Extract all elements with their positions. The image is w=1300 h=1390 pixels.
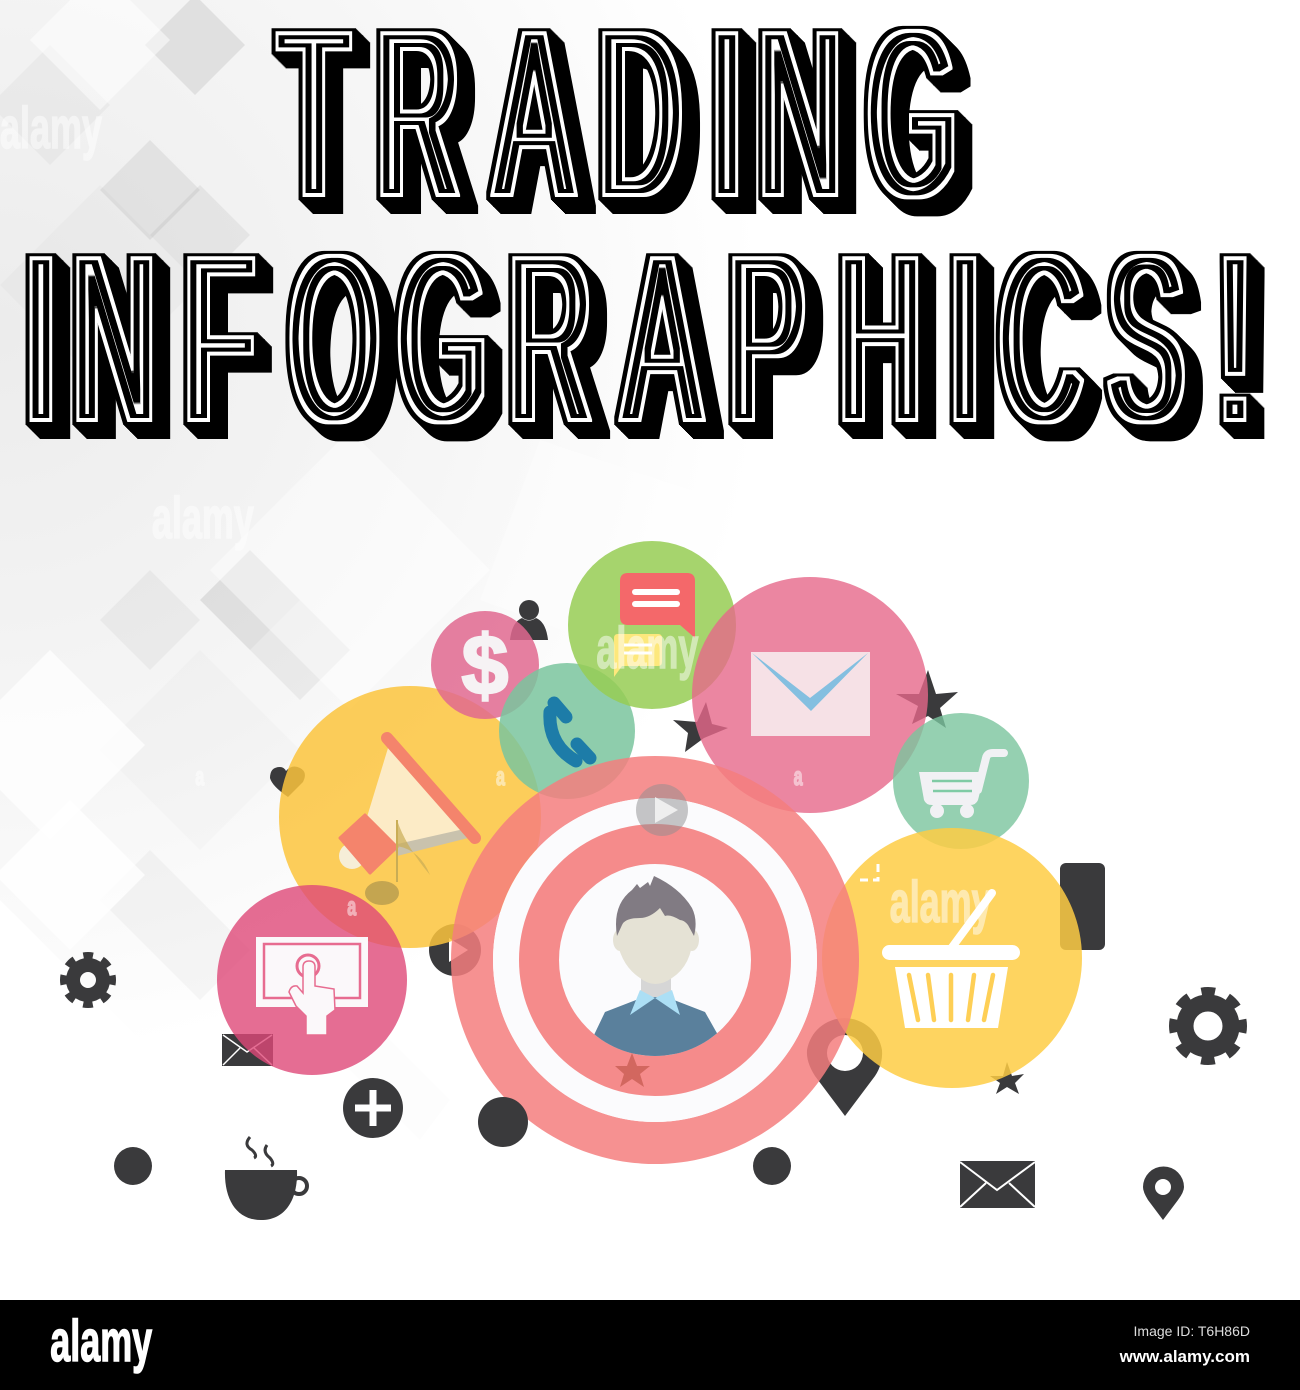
circle: dollar — [431, 611, 539, 719]
watermarks: alamy — [890, 870, 992, 935]
icon: star overlay on ring — [615, 1053, 650, 1087]
icon: play grey — [636, 784, 688, 836]
circle: green chat — [568, 541, 736, 709]
icon: large envelope — [960, 1161, 1035, 1208]
icon: star near phone — [673, 702, 728, 752]
watermarks: alamy — [0, 96, 102, 161]
circle: pink mail — [692, 577, 928, 813]
title line 2: INFOGRAPHICS!: INFOGRAPHICS! — [25, 206, 1251, 472]
footer image id: Image ID: T6H86D — [1134, 1323, 1250, 1339]
icon: star bottom right — [990, 1062, 1024, 1094]
watermarks — [0, 96, 992, 935]
icon: plus — [343, 1078, 403, 1138]
icon: small envelope — [222, 1034, 273, 1066]
avatar — [590, 876, 720, 1060]
icon: envelope — [751, 652, 870, 736]
circle: yellow megaphone — [279, 686, 541, 948]
icon: small pin — [1143, 1166, 1184, 1220]
icon: dots — [114, 1097, 791, 1185]
footer logo: alamy — [50, 1309, 152, 1374]
icon: person — [510, 600, 548, 640]
icon: dollar sign: $ — [462, 618, 508, 712]
icon: star on ring — [615, 1053, 650, 1087]
circle: teal cart — [893, 713, 1029, 849]
circle: yellow basket — [822, 828, 1082, 1088]
title — [25, 0, 1251, 472]
circle: pink hand — [217, 885, 407, 1075]
icon: megaphone — [339, 738, 475, 905]
watermarks: a — [347, 891, 357, 921]
dashed corner marks — [860, 860, 878, 880]
watermarks: a — [195, 761, 205, 791]
dark icons layer beneath circles — [222, 600, 1105, 1116]
icon: play dark — [429, 924, 481, 976]
icon: heart blob — [270, 767, 305, 797]
circle: teal phone — [499, 663, 635, 799]
watermarks: a — [794, 761, 803, 791]
icon: chat bubbles — [614, 573, 695, 677]
icon: dark tablet — [1060, 863, 1105, 950]
icon: shopping cart — [919, 753, 1004, 818]
watermarks: a — [496, 761, 506, 791]
icon: shopping basket — [882, 893, 1020, 1028]
icon: coffee cup — [225, 1137, 307, 1220]
icon: touch tablet — [256, 937, 368, 1035]
icon: phone — [550, 703, 590, 761]
watermarks: alamy — [596, 616, 699, 681]
central target rings — [451, 756, 859, 1164]
watermarks: alamy — [152, 486, 254, 551]
icon: gear left — [64, 956, 112, 1004]
icon: gear right — [1174, 992, 1242, 1060]
footer bar — [0, 1300, 1300, 1390]
icon: star near cart — [896, 670, 958, 728]
footer url: www.alamy.com — [1119, 1347, 1250, 1366]
icon: large map pin — [807, 1018, 882, 1116]
